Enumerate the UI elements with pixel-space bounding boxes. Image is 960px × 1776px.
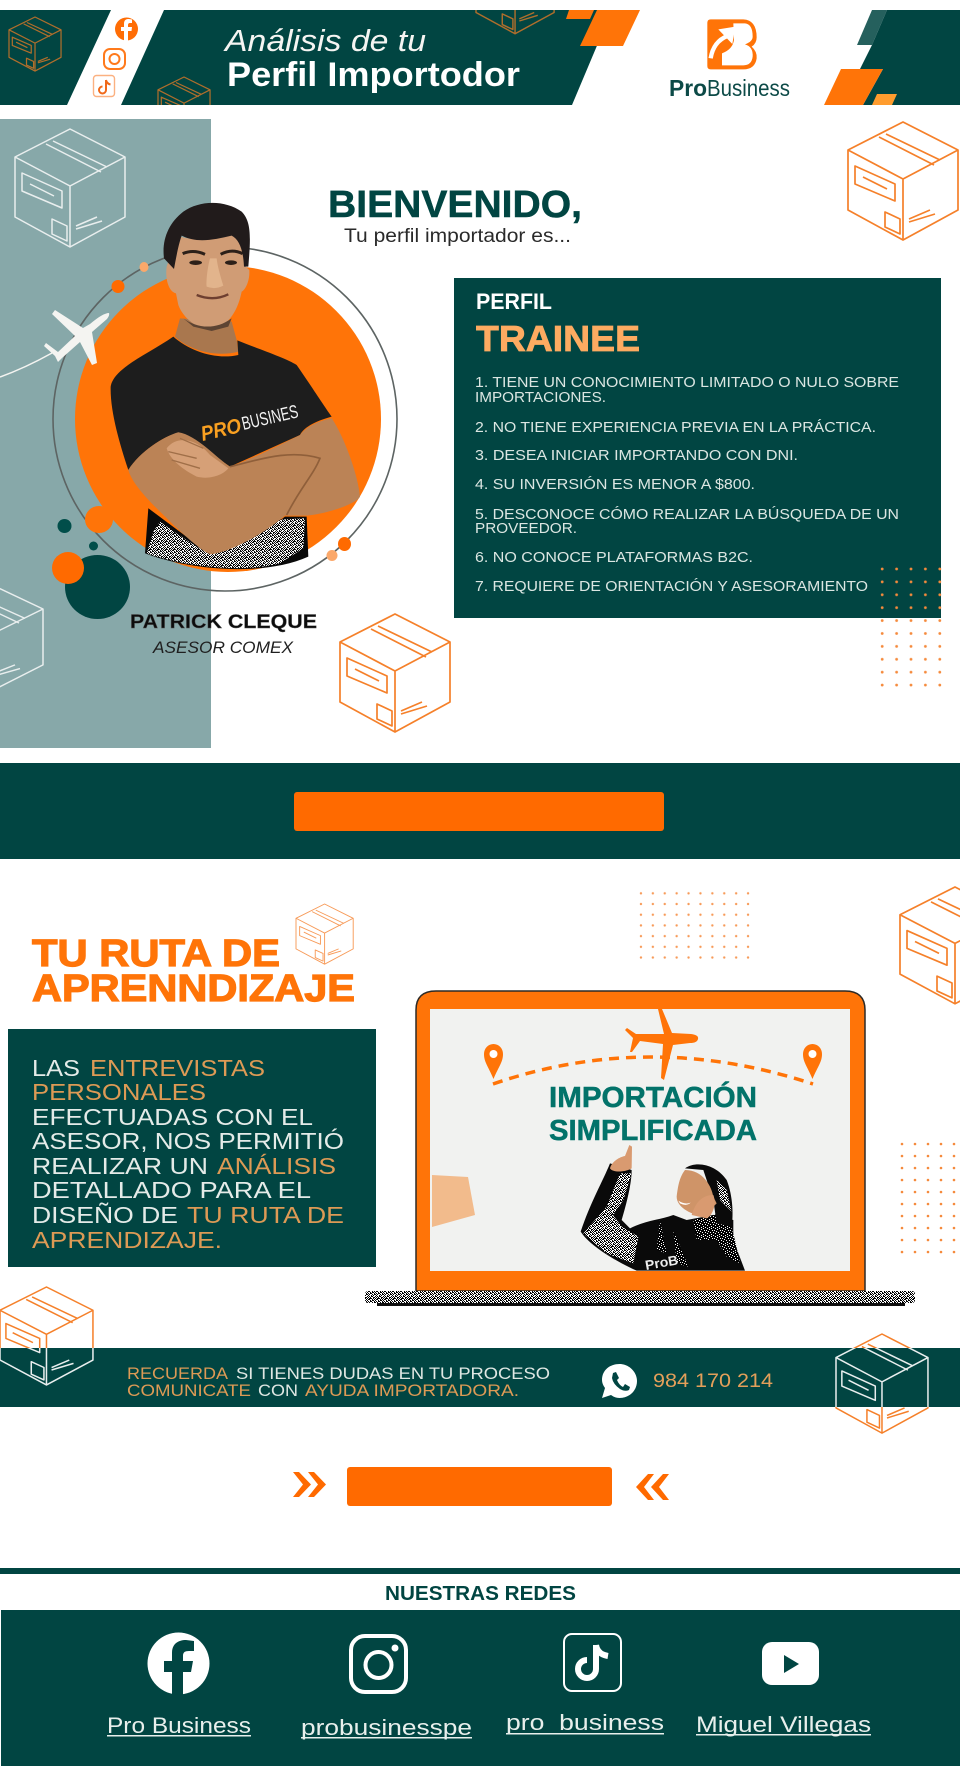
band: cta 1 bbox=[0, 763, 960, 859]
paragraph: LAS bbox=[32, 1055, 80, 1081]
paragraph: APRENDIZAJE. bbox=[32, 1227, 222, 1253]
contact text: SI TIENES DUDAS EN TU PROCESO bbox=[236, 1364, 550, 1383]
link: probusinesspe bbox=[301, 1715, 472, 1740]
profile list: 5. DESCONOCE CÓMO REALIZAR LA BÚSQUEDA DE UN bbox=[475, 506, 899, 523]
decorative dots bbox=[52, 262, 351, 619]
person: BUSINES bbox=[239, 401, 300, 434]
icon: box bottom-right bbox=[836, 1334, 928, 1433]
header title line 2: Perfil Importodor bbox=[227, 56, 520, 94]
icon: parcel bbox=[432, 1175, 475, 1227]
paragraph: DISEÑO DE bbox=[32, 1202, 178, 1228]
icon: youtube bbox=[762, 1642, 819, 1685]
icon: instagram bbox=[351, 1636, 406, 1692]
advisor role: ASESOR COMEX bbox=[152, 638, 294, 657]
panel: trainee profile bbox=[454, 278, 941, 618]
paragraph: DETALLADO PARA EL bbox=[32, 1177, 311, 1203]
icon: box white left cropped bbox=[0, 583, 43, 693]
chevrons right bbox=[636, 1474, 669, 1500]
icon: small box bbox=[296, 904, 353, 964]
icon: box left bbox=[9, 17, 61, 71]
youtube bbox=[696, 1642, 871, 1737]
icon: box bottom-left bbox=[0, 1287, 93, 1385]
paragraph: PERSONALES bbox=[32, 1079, 206, 1105]
paragraph: ENTREVISTAS bbox=[90, 1055, 265, 1081]
contact text: CON bbox=[258, 1381, 298, 1400]
heading: ruta de aprendizaje bbox=[32, 933, 355, 1010]
laptop body bbox=[416, 991, 865, 1291]
icon: facebook bbox=[148, 1632, 210, 1695]
banner right shapes bbox=[824, 10, 960, 105]
screen title: SIMPLIFICADA bbox=[549, 1115, 757, 1147]
panel: advisor background bbox=[0, 119, 211, 748]
icon: box middle bbox=[157, 76, 211, 105]
ring bbox=[53, 247, 397, 591]
panel: learning route text bbox=[8, 1029, 376, 1267]
advisor name: PATRICK CLEQUE bbox=[130, 612, 317, 633]
laptop base bbox=[365, 1291, 915, 1306]
link: pro_business bbox=[506, 1710, 664, 1735]
heading: ruta de aprendizaje: TU RUTA DE bbox=[32, 933, 280, 975]
button bbox=[347, 1467, 612, 1506]
logo: Business bbox=[707, 75, 790, 101]
laptop bbox=[365, 991, 915, 1306]
profile list: 3. DESEA INICIAR IMPORTANDO CON DNI. bbox=[475, 448, 798, 464]
link: Miguel Villegas bbox=[696, 1712, 871, 1737]
header title line 1: Análisis de tu bbox=[223, 23, 426, 58]
contact text: RECUERDA bbox=[127, 1364, 229, 1383]
banner title segment bbox=[121, 10, 612, 105]
header banner bbox=[0, 10, 960, 105]
laptop screen bbox=[430, 1009, 850, 1271]
dot grid laptop right bbox=[896, 1138, 960, 1258]
icon: box orange top-right bbox=[848, 122, 958, 240]
icon: box orange centre bbox=[340, 614, 450, 732]
profile list: 4. SU INVERSIÓN ES MENOR A $800. bbox=[475, 476, 755, 493]
woman pointing: ProB bbox=[644, 1252, 680, 1273]
heading: nuestras redes: NUESTRAS REDES bbox=[385, 1583, 576, 1605]
advisor portrait bbox=[0, 203, 397, 657]
phone number: 984 170 214 bbox=[653, 1371, 773, 1392]
profile list: 2. NO TIENE EXPERIENCIA PREVIA EN LA PRÁCTICA. bbox=[475, 419, 876, 436]
icon: facebook small bbox=[115, 18, 138, 41]
contact text: COMUNICATE bbox=[127, 1381, 251, 1400]
contact text: AYUDA IMPORTADORA. bbox=[305, 1381, 519, 1400]
divider bbox=[0, 1568, 960, 1574]
screen title: IMPORTACIÓN bbox=[549, 1080, 757, 1114]
profile list bbox=[475, 375, 899, 595]
icon: tiktok bbox=[564, 1634, 621, 1691]
band: contact bbox=[0, 1348, 960, 1407]
paragraph: REALIZAR UN bbox=[32, 1153, 208, 1179]
profile list: IMPORTACIONES. bbox=[475, 390, 606, 406]
chevrons left bbox=[293, 1472, 326, 1497]
person: PRO bbox=[199, 414, 243, 446]
icon: tiktok small bbox=[94, 76, 114, 96]
profile list: 1. TIENE UN CONOCIMIENTO LIMITADO O NULO SOBRE bbox=[475, 375, 899, 391]
facebook bbox=[107, 1632, 251, 1738]
profile list: PROVEEDOR. bbox=[475, 521, 577, 537]
paragraph bbox=[32, 1055, 344, 1253]
icon: box white top-left bbox=[15, 129, 125, 247]
icon: pin left bbox=[484, 1044, 503, 1079]
paragraph: ASESOR, NOS PERMITIÓ bbox=[32, 1128, 344, 1154]
logo: Pro bbox=[669, 75, 707, 101]
icon: box top bbox=[475, 10, 555, 34]
contact text bbox=[127, 1364, 550, 1400]
icon: instagram small bbox=[104, 49, 125, 69]
orange circle bbox=[75, 266, 381, 572]
heading: bienvenido: BIENVENIDO, bbox=[328, 184, 582, 226]
subheading: Tu perfil importador es... bbox=[344, 226, 571, 247]
profile list: 7. REQUIERE DE ORIENTACIÓN Y ASESORAMIENTO bbox=[475, 578, 868, 595]
profile list: 6. NO CONOCE PLATAFORMAS B2C. bbox=[475, 550, 753, 566]
icon: plane white bbox=[0, 310, 109, 377]
banner left segment bbox=[0, 10, 111, 105]
dot grid right bbox=[875, 562, 947, 692]
button bbox=[294, 792, 664, 831]
paragraph: ANÁLISIS bbox=[217, 1153, 336, 1179]
orange accent shapes bbox=[566, 10, 640, 46]
icon: pin right bbox=[803, 1044, 822, 1079]
icon: plane route bbox=[493, 1009, 813, 1084]
paragraph: EFECTUADAS CON EL bbox=[32, 1104, 313, 1130]
link: Pro Business bbox=[107, 1713, 251, 1738]
icon: box right cropped bbox=[900, 887, 960, 1004]
cta 2 bbox=[293, 1467, 669, 1506]
panel: social networks bbox=[1, 1610, 960, 1766]
heading: ruta de aprendizaje: APRENNDIZAJE bbox=[32, 968, 355, 1010]
paragraph: TU RUTA DE bbox=[187, 1202, 344, 1228]
woman pointing bbox=[581, 1145, 745, 1273]
profile name: TRAINEE bbox=[476, 318, 640, 359]
person bbox=[111, 203, 360, 569]
tiktok bbox=[506, 1634, 664, 1735]
instagram bbox=[301, 1636, 472, 1740]
screen title bbox=[549, 1080, 757, 1147]
icon: whatsapp bbox=[602, 1364, 637, 1398]
logo bbox=[669, 19, 790, 101]
dot grid top bbox=[635, 888, 754, 963]
profile label: PERFIL bbox=[476, 289, 552, 314]
